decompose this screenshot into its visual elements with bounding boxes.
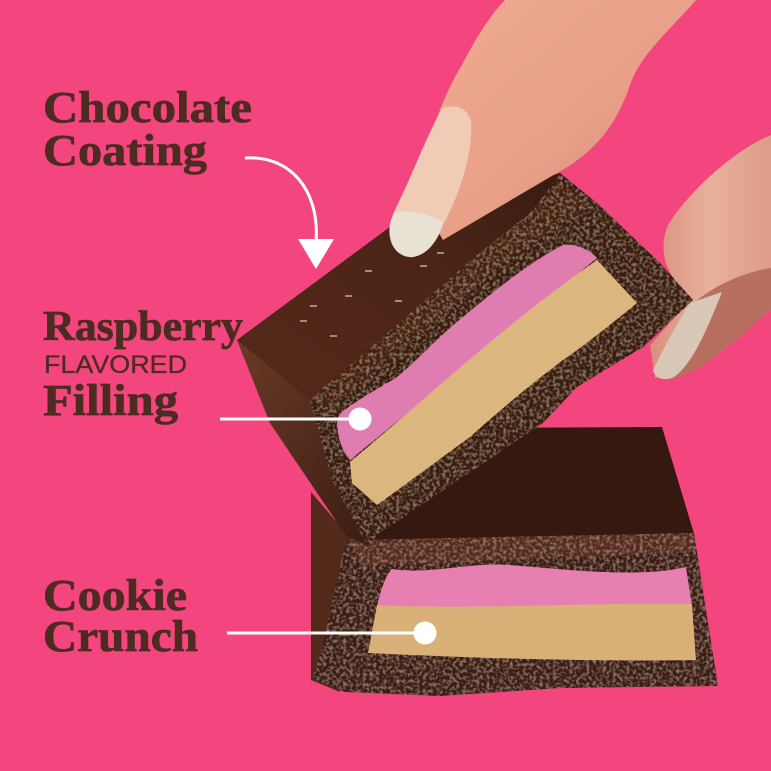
lower piece upper rim [350, 533, 696, 566]
arrow: to chocolate coating [245, 158, 334, 269]
heading: Raspberry Flavored Filling: Filling [43, 376, 178, 425]
upper piece upper edge highlight [312, 180, 590, 415]
pointer: cookie crunch [227, 622, 436, 644]
upper piece top surface [237, 173, 560, 400]
lower piece raspberry filling [377, 565, 692, 607]
heading: Cookie Crunch: Cookie [43, 571, 187, 620]
icon: right finger [650, 135, 771, 380]
lower piece cookie layer [368, 604, 696, 661]
icon: thumb and nail [389, 0, 696, 257]
upper piece cookie layer [350, 260, 637, 505]
upper piece body [237, 173, 693, 545]
lower piece left side [311, 492, 352, 692]
lower chocolate piece [311, 427, 718, 696]
heading: Cookie Crunch [43, 571, 198, 661]
upper piece left face [237, 340, 367, 545]
upper piece raspberry filling [337, 245, 597, 460]
lower piece top surface [345, 427, 695, 548]
upper chocolate piece [237, 173, 693, 545]
imprint dots [300, 252, 444, 337]
heading: Cookie Crunch: Crunch [43, 612, 198, 661]
heading: Chocolate Coating: Coating [43, 126, 207, 175]
heading: Chocolate Coating: Chocolate [43, 83, 252, 132]
pointer: raspberry filling [220, 408, 372, 430]
heading: Raspberry Flavored Filling [43, 304, 243, 425]
heading: Chocolate Coating [43, 83, 252, 175]
lower piece body [312, 533, 718, 696]
heading: Raspberry Flavored Filling: Raspberry [43, 304, 243, 350]
heading: Raspberry Flavored Filling: FLAVORED [44, 351, 187, 379]
